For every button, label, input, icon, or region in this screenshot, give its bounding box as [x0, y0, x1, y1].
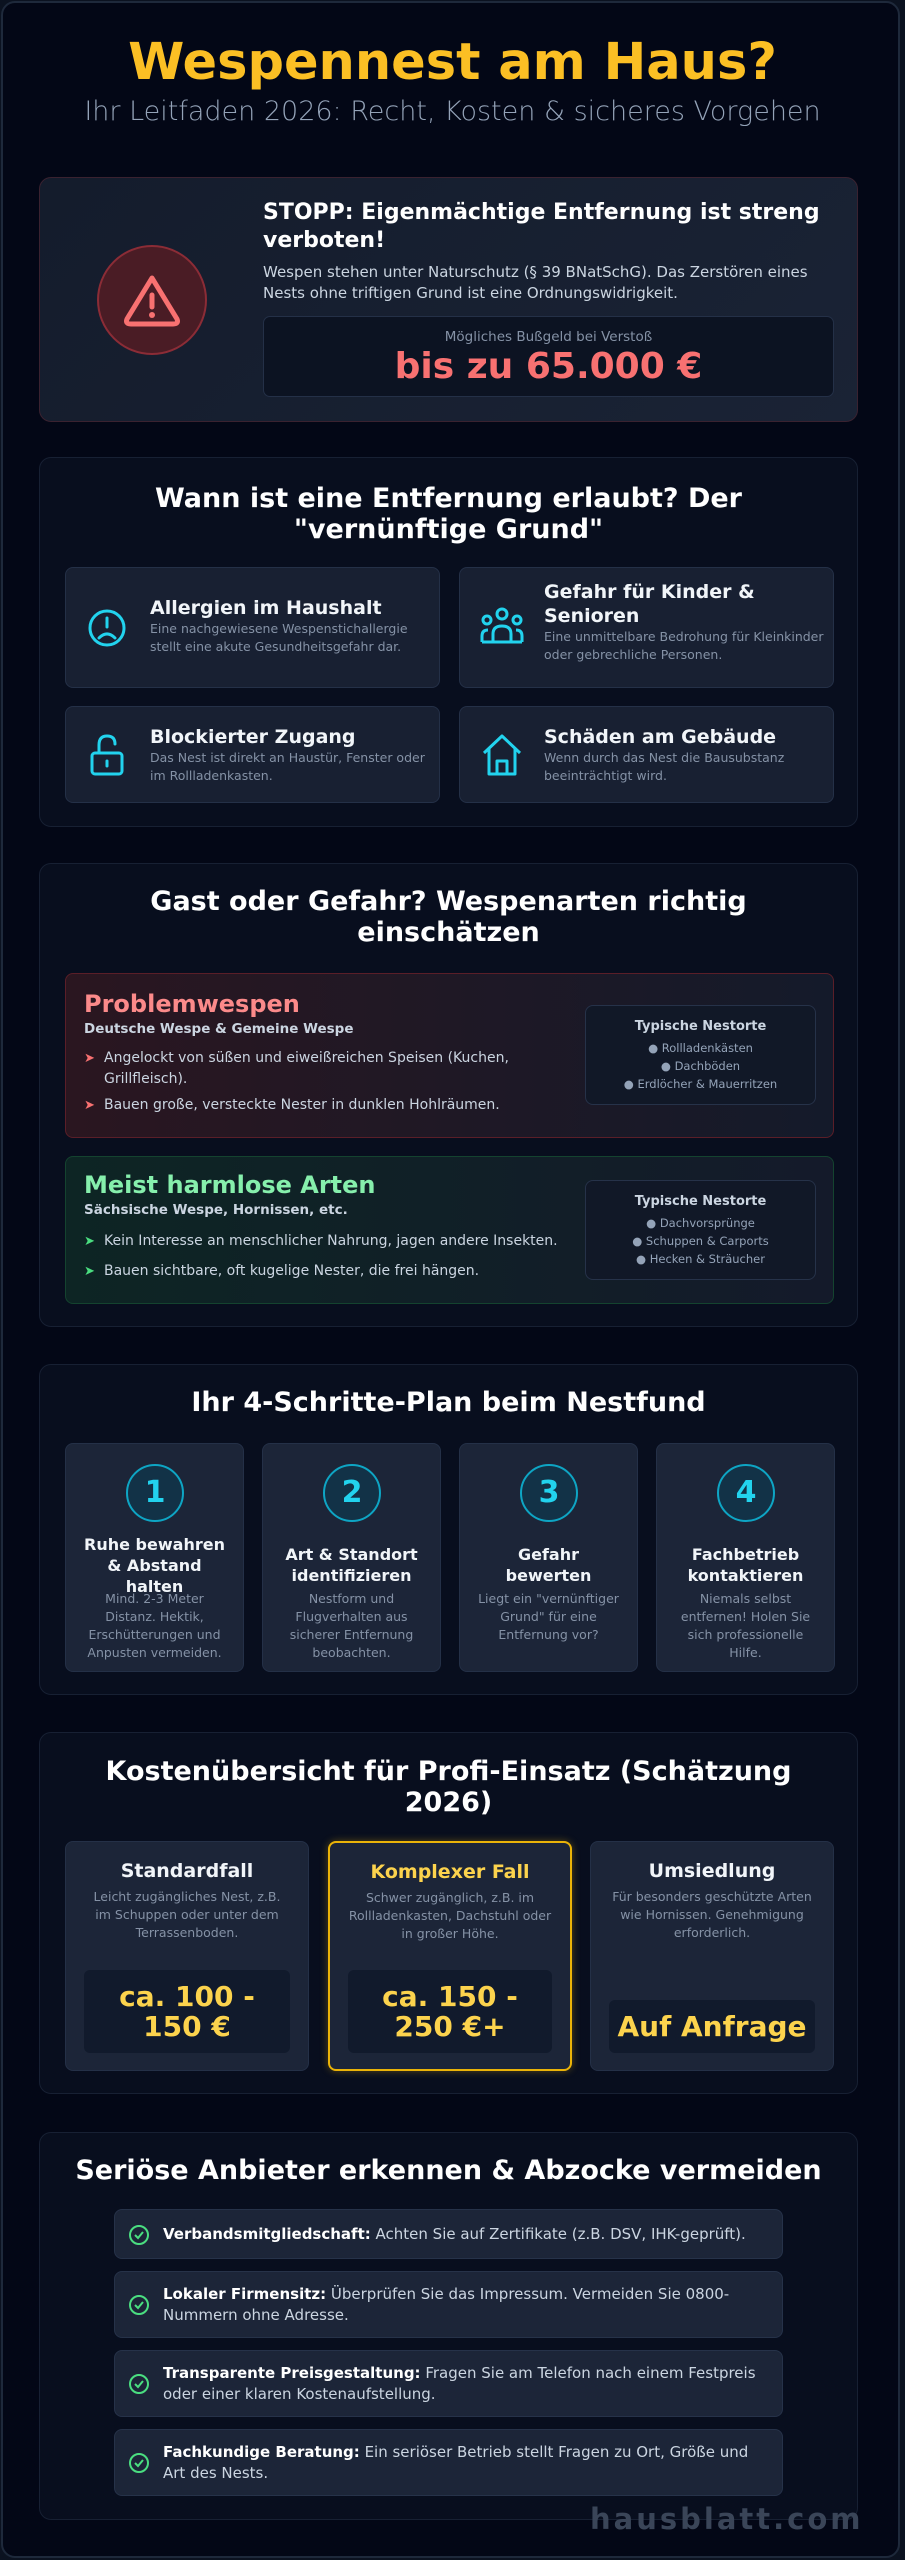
cost: Umsiedlung: Auf Anfrage: [617, 2010, 807, 2042]
fine box: Mögliches Bußgeld bei Verstoß: [445, 329, 652, 345]
cost: Komplex: ca. 150 -: [382, 1980, 518, 2012]
card: Zugang: Blockierter Zugang: [150, 726, 356, 748]
step 1: 1: [145, 1475, 165, 1510]
icon: people: [480, 608, 524, 644]
fine box: bis zu 65.000 €: [395, 346, 702, 387]
check item 2: Lokaler Firmensitz: Überprüfen Sie das Impressum. Vermeiden Sie 0800-Nummern ohne Adresse.: [163, 2285, 729, 2324]
warning heading: STOPP: Eigenmächtige Entfernung ist streng verboten!: [263, 200, 820, 253]
card: Allergien: [65, 567, 440, 688]
panel: warning: [39, 177, 858, 422]
subtitle: Ihr Leitfaden 2026: Recht, Kosten & sicheres Vorgehen: [84, 96, 821, 127]
card: Problemwespen: Bauen große, versteckte Nester in dunklen Hohlräumen.: [104, 1097, 500, 1113]
cost: Standard: 150 €: [143, 2010, 231, 2042]
icon: lock: [90, 734, 124, 776]
heading: [106, 1756, 791, 1818]
step 1: [65, 1443, 244, 1672]
title: Wespennest am Haus?: [128, 33, 777, 92]
heading: Wann ist eine Entfernung erlaubt? Der: [155, 483, 742, 514]
step 2: Art & Standort identifizieren: [285, 1545, 418, 1585]
card: Zugang: [65, 706, 440, 803]
panel: vernünftiger Grund: [39, 457, 858, 827]
panel: Wespenarten: [39, 863, 858, 1327]
card: Gebäude: Wenn durch das Nest die Bausubstanz beeinträchtigt wird.: [544, 750, 784, 783]
cost: Umsiedlung: Umsiedlung: [649, 1860, 775, 1882]
heading: Ihr 4-Schritte-Plan beim Nestfund: [191, 1387, 706, 1418]
step 3: [459, 1443, 638, 1672]
card: harmlose Arten: [65, 1156, 834, 1304]
step 3: Gefahr: [518, 1545, 579, 1564]
check item 3: Transparente Preisgestaltung: Fragen Sie am Telefon nach einem Festpreis oder einer klaren Kostenaufstellung.: [163, 2364, 756, 2403]
cost: Komplex: Komplexer Fall: [370, 1861, 530, 1883]
check item 1: Verbandsmitgliedschaft: Achten Sie auf Zertifikate (z.B. DSV, IHK-geprüft).: [163, 2225, 746, 2243]
bullets: ➤: [84, 1234, 95, 1249]
fine box: [263, 316, 834, 397]
card: Allergien: Allergien im Haushalt: [150, 597, 382, 619]
cost: Standard: [65, 1841, 309, 2071]
icon: warning triangle: [97, 245, 207, 355]
nest locations: ● Schuppen & Carports: [632, 1234, 769, 1248]
cost: Komplex: [328, 1841, 572, 2071]
heading: "vernünftige Grund": [294, 514, 603, 545]
heading: einschätzen: [357, 917, 540, 948]
card: Kinder: [459, 567, 834, 688]
nest locations: Typische Nestorte: [635, 1019, 766, 1034]
step 2: Nestform und Flugverhalten aus sicherer Entfernung beobachten.: [290, 1591, 413, 1660]
card: Kinder: Eine unmittelbare Bedrohung für Kleinkinder oder gebrechliche Personen.: [544, 629, 824, 662]
card: Problemwespen: Deutsche Wespe & Gemeine Wespe: [84, 1021, 354, 1037]
warning text: Wespen stehen unter Naturschutz (§ 39 BNatSchG). Das Zerstören eines Nests ohne triftigen Grund ist eine Ordnungswidrigkeit.: [263, 263, 808, 302]
card: Kinder: Gefahr für Kinder & Senioren: [544, 581, 755, 627]
cost: Umsiedlung: [590, 1841, 834, 2071]
icon: face: [88, 610, 126, 646]
step 1: Mind. 2-3 Meter Distanz. Hektik, Erschütterungen und Anpusten vermeiden.: [87, 1591, 222, 1660]
nest locations: [585, 1005, 816, 1105]
bullets: Angelockt von süßen und eiweißreichen Speisen (Kuchen, Grillfleisch).: [104, 1050, 509, 1087]
heading: Seriöse Anbieter erkennen & Abzocke vermeiden: [75, 2155, 822, 2186]
check item 4: [114, 2429, 783, 2496]
nest locations: ● Rollladenkästen: [648, 1041, 753, 1055]
check item 2: [114, 2271, 783, 2338]
panel: seriöse Anbieter: [39, 2132, 858, 2520]
panel: Kosten: [39, 1732, 858, 2094]
card: Problemwespen: [65, 973, 834, 1138]
bullets: Kein Interesse an menschlicher Nahrung, jagen andere Insekten.: [104, 1233, 558, 1249]
heading: 2026): [405, 1787, 492, 1818]
step 1: Ruhe bewahren & Abstand halten: [84, 1535, 225, 1596]
heading: [150, 886, 747, 948]
card: Gebäude: [459, 706, 834, 803]
panel: 4 steps: [39, 1364, 858, 1695]
nest locations: ● Hecken & Sträucher: [636, 1252, 765, 1266]
check item 1: [114, 2209, 783, 2259]
nest locations: Typische Nestorte: [635, 1194, 766, 1209]
step 3: bewerten: [506, 1566, 591, 1585]
step 4: 4: [736, 1475, 756, 1510]
card: Allergien: Eine nachgewiesene Wespenstichallergie stellt eine akute Gesundheitsgefahr dar.: [150, 621, 408, 654]
card: harmlose Arten: Bauen sichtbare, oft kugelige Nester, die frei hängen.: [104, 1263, 479, 1279]
card: harmlose Arten: ➤: [84, 1264, 95, 1279]
step 4: Fachbetrieb kontaktieren: [688, 1545, 803, 1585]
heading: Kostenübersicht für Profi-Einsatz (Schätzung: [106, 1756, 791, 1787]
bullets: ➤: [84, 1051, 95, 1066]
card: harmlose Arten: Sächsische Wespe, Hornissen, etc.: [84, 1202, 348, 1218]
card: Gebäude: Schäden am Gebäude: [544, 726, 776, 748]
step 3: 3: [539, 1475, 559, 1510]
heading: Gast oder Gefahr? Wespenarten richtig: [150, 886, 747, 917]
nest locations: ● Dachvorsprünge: [646, 1216, 755, 1230]
nest locations: ● Erdlöcher & Mauerritzen: [624, 1077, 777, 1091]
step 2: [262, 1443, 441, 1672]
card: Problemwespen: Problemwespen: [84, 990, 300, 1018]
card: harmlose Arten: Meist harmlose Arten: [84, 1171, 376, 1199]
cost: Komplex: Schwer zugänglich, z.B. im Rollladenkasten, Dachstuhl oder in großer Höhe.: [349, 1890, 551, 1941]
check item 4: Fachkundige Beratung: Ein seriöser Betrieb stellt Fragen zu Ort, Größe und Art des Nests.: [163, 2443, 748, 2482]
step 2: 2: [342, 1475, 362, 1510]
step 4: Niemals selbst entfernen! Holen Sie sich professionelle Hilfe.: [681, 1591, 810, 1660]
cost: Umsiedlung: Für besonders geschützte Arten wie Hornissen. Genehmigung erforderlich.: [612, 1889, 812, 1940]
nest locations: ● Dachböden: [661, 1059, 740, 1073]
cost: Standard: Standardfall: [121, 1860, 253, 1882]
cost: Standard: Leicht zugängliches Nest, z.B. im Schuppen oder unter dem Terrassenboden.: [94, 1889, 280, 1940]
card: Problemwespen: ➤: [84, 1098, 95, 1113]
check item 3: [114, 2350, 783, 2417]
step 4: [656, 1443, 835, 1672]
cost: Standard: ca. 100 -: [119, 1980, 255, 2012]
card: Zugang: Das Nest ist direkt an Haustür, Fenster oder im Rollladenkasten.: [150, 750, 425, 783]
step 3: Liegt ein "vernünftiger Grund" für eine Entfernung vor?: [478, 1591, 619, 1642]
heading: [155, 483, 742, 545]
nest locations: [585, 1180, 816, 1280]
cost: Komplex: 250 €+: [394, 2010, 506, 2042]
icon: house: [483, 734, 521, 776]
watermark: hausblatt.com: [590, 2502, 863, 2536]
